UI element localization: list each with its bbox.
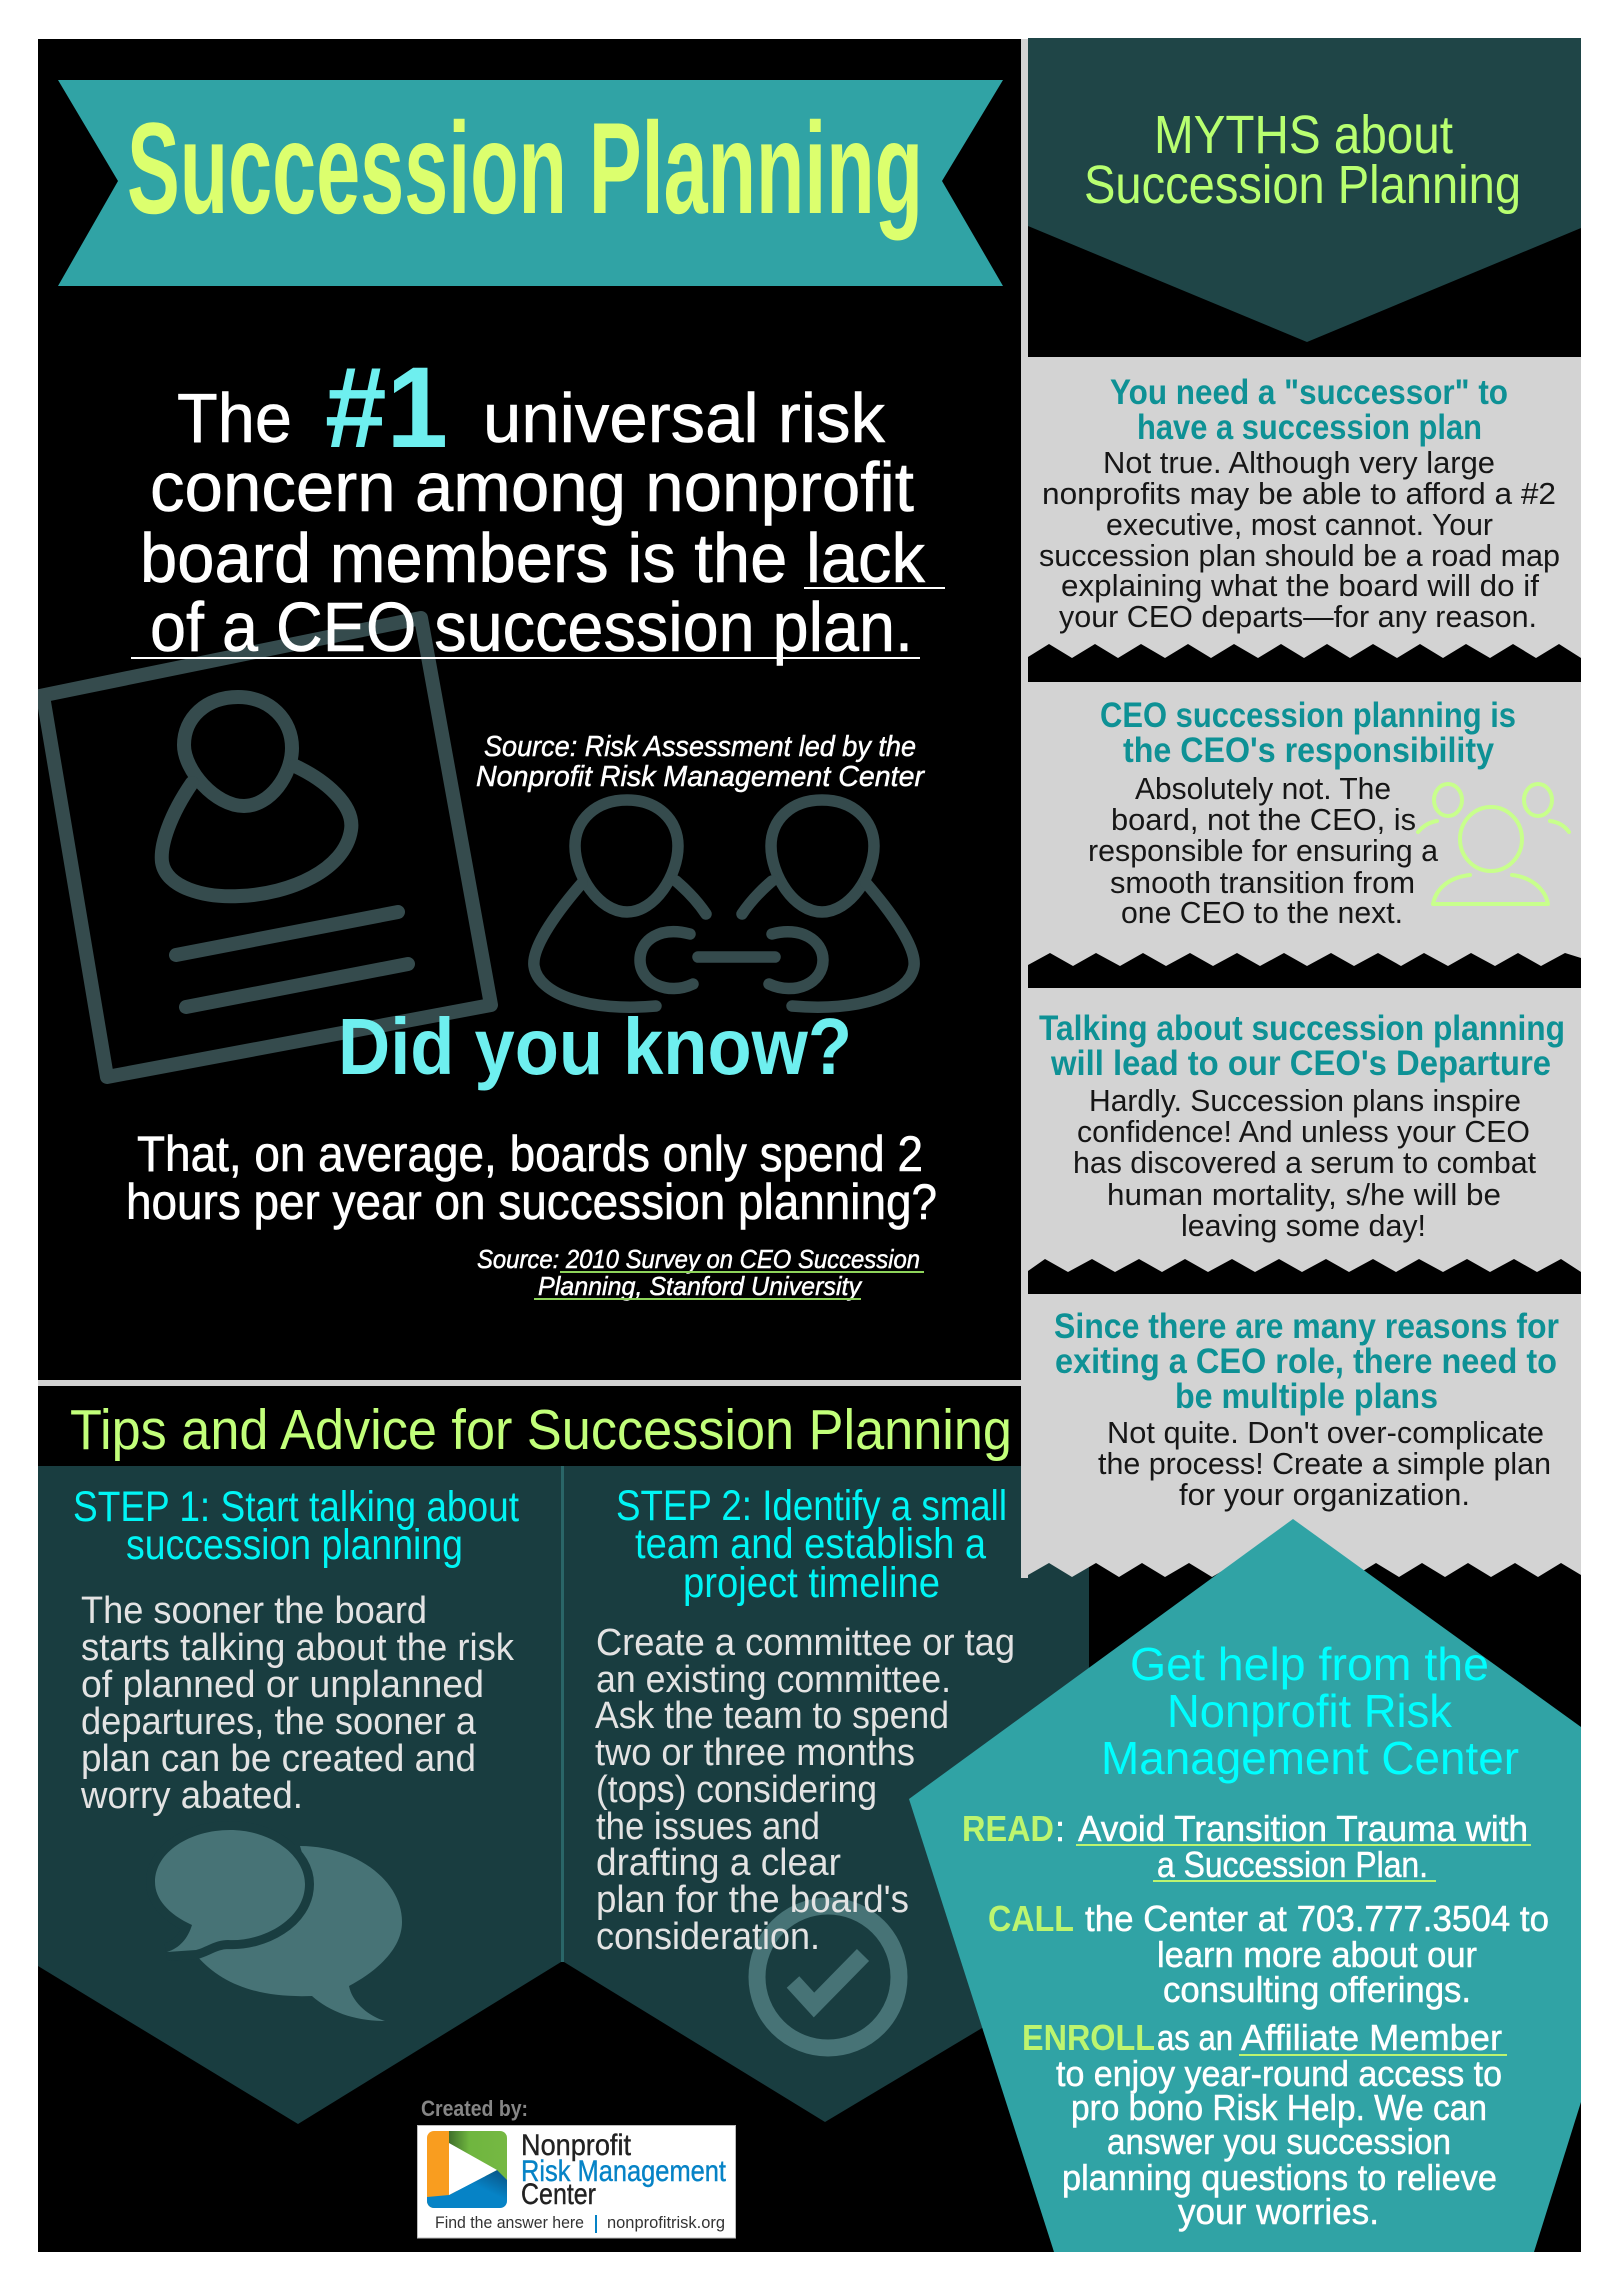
step 1 text bbox=[80, 1590, 515, 1817]
icon: group of people bbox=[1418, 784, 1569, 904]
enroll text: as an bbox=[1157, 2017, 1233, 2058]
icon: check mark circle bbox=[757, 1906, 899, 2048]
read link: a Succession Plan. bbox=[1157, 1844, 1428, 1885]
icon: speech bubbles bbox=[155, 1830, 402, 2021]
enroll text: Affiliate Member bbox=[1241, 2017, 1502, 2058]
logo: Nonprofit Risk Management Center: Risk Management bbox=[521, 2155, 727, 2188]
enroll text bbox=[1022, 2017, 1507, 2232]
panel: get help pentagon bbox=[909, 1519, 1581, 2252]
enroll text: your worries. bbox=[1178, 2191, 1379, 2232]
call text: learn more about our bbox=[1157, 1934, 1477, 1975]
myths heading: MYTHS about bbox=[1154, 105, 1453, 165]
panel: step 1 bbox=[38, 1466, 561, 2124]
source: risk assessment: Source: Risk Assessment led by the bbox=[484, 731, 916, 763]
myth 1 text: Not true. Although very large bbox=[1103, 445, 1495, 480]
headline statistic: #1 bbox=[325, 344, 448, 472]
get help heading bbox=[1101, 1638, 1519, 1784]
myth 1 text bbox=[1039, 445, 1560, 634]
myth 3 text: leaving some day! bbox=[1181, 1208, 1426, 1243]
enroll text: answer you succession bbox=[1107, 2121, 1451, 2162]
logo: Nonprofit Risk Management Center bbox=[418, 2126, 736, 2238]
step 2 text: consideration. bbox=[596, 1916, 820, 1958]
read link bbox=[962, 1808, 1531, 1885]
headline statistic: universal risk bbox=[483, 379, 886, 457]
myth 2 text: responsible for ensuring a bbox=[1088, 833, 1439, 868]
myth 3 text bbox=[1073, 1083, 1536, 1243]
read link: READ bbox=[962, 1808, 1054, 1849]
myth 2 text bbox=[1088, 771, 1439, 930]
myth 3 text: has discovered a serum to combat bbox=[1073, 1145, 1536, 1180]
panel: myths header bbox=[1028, 38, 1581, 342]
myth 4 text: Not quite. Don't over-complicate bbox=[1107, 1415, 1544, 1450]
myth 3 text: Hardly. Succession plans inspire bbox=[1089, 1083, 1521, 1118]
enroll text: pro bono Risk Help. We can bbox=[1071, 2087, 1487, 2128]
step 2 text: two or three months bbox=[595, 1732, 915, 1774]
myth 1 heading: have a succession plan bbox=[1137, 408, 1482, 447]
step 1 text: worry abated. bbox=[80, 1775, 303, 1817]
read link: : bbox=[1055, 1808, 1065, 1849]
myth 2 text: Absolutely not. The bbox=[1135, 771, 1391, 806]
logo: Nonprofit Risk Management Center: Nonprofit bbox=[521, 2129, 632, 2162]
myth 1 text: nonprofits may be able to afford a #2 bbox=[1042, 476, 1556, 511]
headline statistic: concern among nonprofit bbox=[150, 448, 914, 526]
source: risk assessment: Nonprofit Risk Management Center bbox=[476, 761, 925, 793]
myth 4 text bbox=[1098, 1415, 1551, 1512]
myth 2 text: board, not the CEO, is bbox=[1111, 802, 1416, 837]
enroll text: to enjoy year-round access to bbox=[1056, 2053, 1502, 2094]
myth 1 text: succession plan should be a road map bbox=[1039, 538, 1560, 573]
did you know heading: Did you know? bbox=[338, 1002, 852, 1091]
enroll text: planning questions to relieve bbox=[1062, 2157, 1497, 2198]
myth 1 heading: You need a "successor" to bbox=[1110, 373, 1508, 412]
myth 3 heading: Talking about succession planning bbox=[1039, 1009, 1565, 1048]
myth 2 heading: the CEO's responsibility bbox=[1123, 731, 1494, 770]
step 2 text: Ask the team to spend bbox=[595, 1695, 949, 1737]
step 2 heading: team and establish a bbox=[635, 1520, 986, 1568]
myth 2 text: one CEO to the next. bbox=[1121, 895, 1403, 930]
call text bbox=[988, 1898, 1549, 2010]
step 2 text: (tops) considering bbox=[596, 1769, 877, 1811]
read link: Avoid Transition Trauma with bbox=[1078, 1808, 1528, 1849]
myth 4 heading: Since there are many reasons for bbox=[1054, 1307, 1559, 1346]
step 1 heading bbox=[73, 1483, 519, 1569]
myth 1 text: your CEO departs—for any reason. bbox=[1059, 599, 1537, 634]
myth 2 heading: CEO succession planning is bbox=[1100, 696, 1516, 735]
step 1 text: The sooner the board bbox=[81, 1590, 427, 1632]
myth 4 text: for your organization. bbox=[1179, 1477, 1470, 1512]
source: stanford survey bbox=[477, 1244, 924, 1301]
step 2 heading: project timeline bbox=[683, 1559, 940, 1607]
headline statistic bbox=[131, 344, 945, 666]
myth 1 text: executive, most cannot. Your bbox=[1106, 507, 1493, 542]
did you know statement: That, on average, boards only spend 2 bbox=[137, 1126, 923, 1182]
headline statistic: The bbox=[177, 379, 292, 457]
call text: consulting offerings. bbox=[1163, 1969, 1471, 2010]
created by label: Created by: bbox=[421, 2096, 528, 2121]
tips heading: Tips and Advice for Succession Planning bbox=[70, 1398, 1012, 1462]
myth 4 heading: be multiple plans bbox=[1175, 1377, 1438, 1416]
step 2 heading bbox=[616, 1482, 1007, 1607]
myths heading bbox=[1084, 105, 1521, 215]
myth 4 heading bbox=[1054, 1307, 1559, 1416]
title banner bbox=[58, 80, 1003, 286]
source: risk assessment bbox=[476, 731, 925, 793]
title: Succession Planning bbox=[127, 95, 923, 241]
myth 3 text: human mortality, s/he will be bbox=[1107, 1177, 1501, 1212]
get help heading: Nonprofit Risk bbox=[1167, 1685, 1453, 1737]
panel: myth 2 bbox=[1028, 682, 1581, 966]
panel: myth 3 bbox=[1028, 988, 1581, 1272]
myth 3 text: confidence! And unless your CEO bbox=[1077, 1114, 1530, 1149]
icon: résumé document with person bbox=[30, 618, 491, 1077]
myth 3 heading bbox=[1039, 1009, 1565, 1083]
logo: Nonprofit Risk Management Center: nonprofitrisk.org bbox=[607, 2213, 725, 2232]
step 2 heading: STEP 2: Identify a small bbox=[616, 1482, 1007, 1530]
icon: logo mark bbox=[427, 2131, 507, 2208]
panel: step 2 bbox=[564, 1466, 1089, 2122]
myth 3 heading: will lead to our CEO's Departure bbox=[1050, 1044, 1551, 1083]
step 1 heading: STEP 1: Start talking about bbox=[73, 1483, 519, 1531]
icon: two linked people bbox=[534, 800, 914, 1007]
did you know statement bbox=[126, 1126, 937, 1230]
get help heading: Management Center bbox=[1101, 1732, 1519, 1784]
myth 4 heading: exiting a CEO role, there need to bbox=[1055, 1342, 1557, 1381]
panel: myth 4 bbox=[1028, 1294, 1581, 1577]
step 2 text: the issues and bbox=[596, 1806, 820, 1848]
myth 2 text: smooth transition from bbox=[1110, 865, 1415, 900]
myth 4 text: the process! Create a simple plan bbox=[1098, 1446, 1551, 1481]
step 2 text bbox=[595, 1622, 1015, 1958]
enroll text: ENROLL bbox=[1022, 2017, 1155, 2058]
step 1 text: departures, the sooner a bbox=[81, 1701, 477, 1743]
myths heading: Succession Planning bbox=[1084, 155, 1521, 215]
step 2 text: plan for the board's bbox=[596, 1879, 909, 1921]
myth 1 heading bbox=[1110, 373, 1508, 447]
myth 2 heading bbox=[1100, 696, 1516, 770]
call text: CALL bbox=[988, 1898, 1074, 1939]
step 1 text: plan can be created and bbox=[81, 1738, 476, 1780]
step 2 text: an existing committee. bbox=[596, 1659, 951, 1701]
logo: Nonprofit Risk Management Center: Center bbox=[521, 2178, 596, 2211]
myth 1 text: explaining what the board will do if bbox=[1061, 568, 1539, 603]
step 1 heading: succession planning bbox=[126, 1521, 463, 1569]
logo: Nonprofit Risk Management Center: Find the answer here bbox=[435, 2213, 584, 2232]
step 1 text: starts talking about the risk bbox=[81, 1627, 515, 1669]
step 2 text: drafting a clear bbox=[596, 1842, 841, 1884]
source: stanford survey: Source: 2010 Survey on CEO Succession bbox=[477, 1244, 920, 1274]
step 2 text: Create a committee or tag bbox=[596, 1622, 1015, 1664]
step 1 text: of planned or unplanned bbox=[81, 1664, 484, 1706]
call text: the Center at 703.777.3504 to bbox=[1085, 1898, 1549, 1939]
did you know statement: hours per year on succession planning? bbox=[126, 1174, 937, 1230]
panel: myth 1 bbox=[1028, 357, 1581, 658]
headline statistic: board members is the lack bbox=[140, 519, 926, 597]
source: stanford survey: Planning, Stanford University bbox=[538, 1271, 863, 1301]
get help heading: Get help from the bbox=[1130, 1638, 1489, 1690]
headline statistic: of a CEO succession plan. bbox=[150, 588, 913, 666]
